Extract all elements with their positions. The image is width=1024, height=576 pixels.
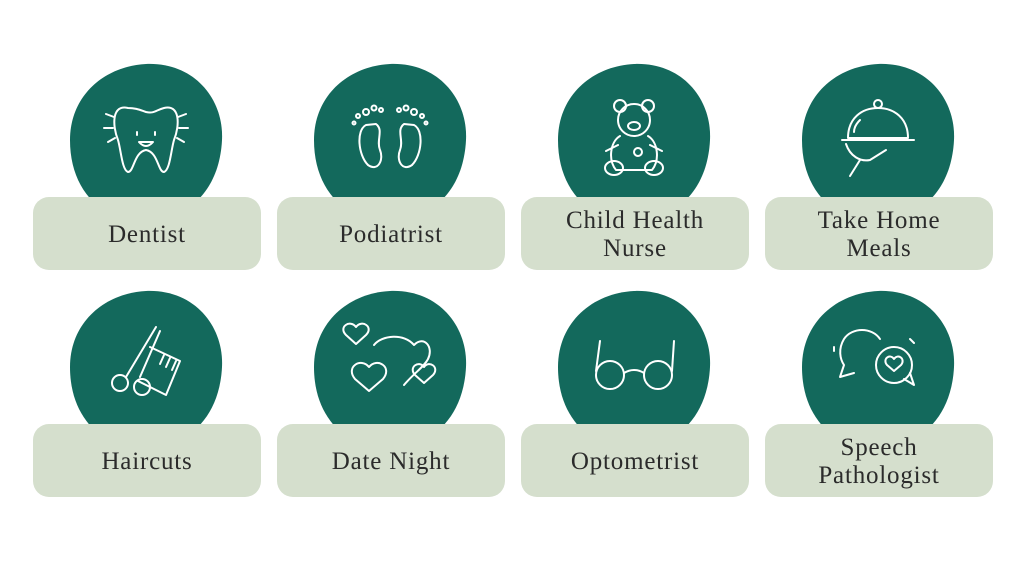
label card	[521, 197, 749, 270]
cell: Speech Pathologist: Speech	[840, 434, 918, 461]
label card	[277, 424, 505, 497]
label card	[277, 197, 505, 270]
cell: Dentist	[33, 64, 261, 270]
icon: scissors and comb	[112, 327, 180, 395]
cell: Date Night: Date Night	[332, 448, 450, 475]
label card	[765, 197, 993, 270]
label card	[33, 424, 261, 497]
icon: speech bubbles	[834, 330, 914, 385]
icon: tooth	[104, 108, 188, 172]
cell: Haircuts	[33, 291, 261, 497]
cell: Take Home Meals: Take Home	[818, 207, 940, 234]
label card	[765, 424, 993, 497]
label card	[33, 197, 261, 270]
icon: teddy bear	[605, 100, 663, 175]
cell: Date Night	[277, 291, 505, 497]
cell: Child Health Nurse	[521, 64, 749, 270]
cell: Optometrist: Optometrist	[571, 448, 699, 475]
cell: Optometrist	[521, 291, 749, 497]
cell: Podiatrist: Podiatrist	[339, 221, 443, 248]
label card	[521, 424, 749, 497]
cell: Podiatrist	[277, 64, 505, 270]
cell: Take Home Meals	[765, 64, 993, 270]
cell: Child Health Nurse: Child Health	[566, 207, 704, 234]
cell: Speech Pathologist: Pathologist	[818, 462, 940, 489]
cell: Haircuts: Haircuts	[101, 448, 193, 475]
icon: hearts	[343, 324, 435, 391]
icon: feet	[352, 106, 428, 167]
cell: Dentist: Dentist	[108, 221, 186, 248]
cell: Child Health Nurse: Nurse	[603, 235, 667, 262]
icon: glasses	[596, 341, 674, 389]
cell: Take Home Meals: Meals	[846, 235, 912, 262]
cell: Speech Pathologist	[765, 291, 993, 497]
icon: cloche	[842, 100, 914, 176]
